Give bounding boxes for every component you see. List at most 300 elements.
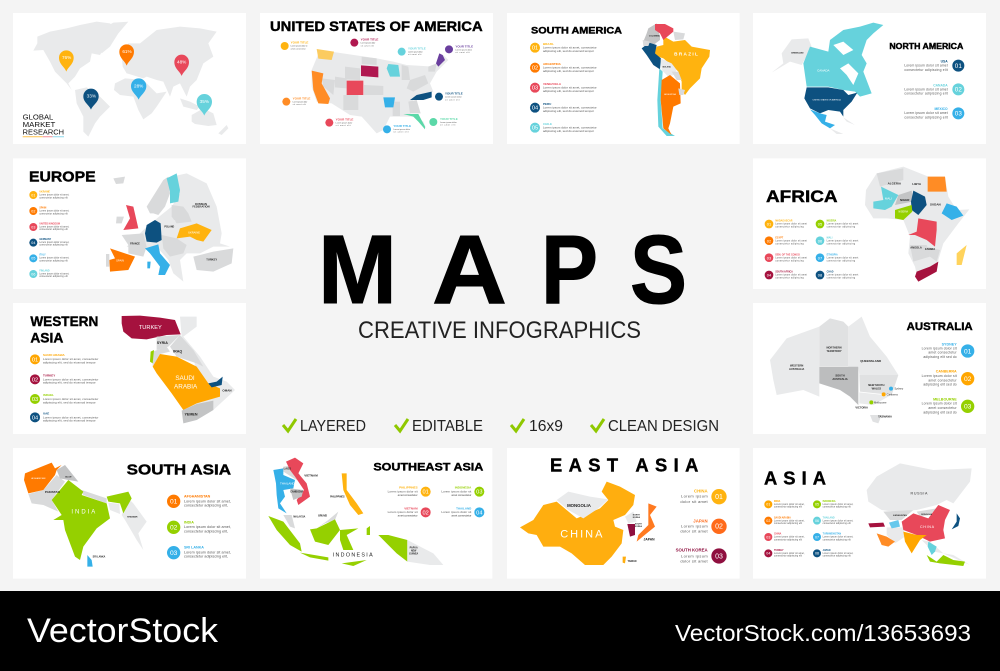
callout: florida: sit amet elit xyxy=(440,124,456,127)
item 06 thailand xyxy=(813,516,854,525)
item 02 saudi arabia: SAUDI ARABIA xyxy=(774,516,791,519)
feature: 16x9: 16x9 xyxy=(529,418,563,435)
item 01 madagascar: Lorem ipsum dolor sit amet xyxy=(775,222,807,225)
pin: 33%: 33% xyxy=(87,93,96,98)
item 02 vietnam xyxy=(388,506,431,518)
western asia map: SYRIA xyxy=(157,341,168,345)
callout: colorado: Lorem ipsum dolor xyxy=(336,121,353,124)
item 05 xyxy=(530,122,597,133)
item 01 sydney: amet consectetur xyxy=(928,351,958,355)
item 06 mali: consectetur adipiscing xyxy=(827,242,856,245)
item 03 dr congo xyxy=(765,253,807,262)
item 03 dr congo: Lorem ipsum dolor sit amet xyxy=(775,256,807,259)
western asia map: ARABIA xyxy=(174,383,198,390)
item 01: adipiscing elit, sed do eiusmod tempor xyxy=(543,49,594,53)
item 03 south korea: SOUTH KOREA xyxy=(676,548,709,553)
item 04 thailand: amet consectetur xyxy=(451,514,471,518)
item 02 spain xyxy=(29,207,70,215)
callout: california: Lorem ipsum dolor xyxy=(293,100,308,103)
item 01 afghanistan: consectetur adipiscing elit, xyxy=(184,504,228,508)
southeast asia map: CAMBODIA xyxy=(290,491,303,494)
asia map: MONGOLIA xyxy=(921,513,933,516)
item 04: PERU xyxy=(543,102,551,106)
australia map: NEW SOUTH xyxy=(868,383,885,387)
item 04 south africa xyxy=(765,270,807,279)
item 04 south africa: consectetur adipiscing xyxy=(775,276,804,279)
africa map: SUDAN xyxy=(930,203,941,207)
item 02 saudi arabia: consectetur adipiscing elit xyxy=(774,522,802,525)
panel: europe xyxy=(13,158,246,289)
item 03 xyxy=(530,82,597,93)
africa map: NIGERIA xyxy=(899,211,909,214)
pin: canberra: Canberra xyxy=(887,392,898,396)
item 05 indonesia: Lorem ipsum dolor sit amet, xyxy=(823,503,854,506)
item 05 nigeria: consectetur adipiscing xyxy=(827,225,856,228)
callout: maine: YOUR TITLE xyxy=(455,44,473,48)
southeast asia map: MALAYSIA xyxy=(293,515,306,518)
east asia map: KOREA xyxy=(633,516,640,519)
watermark footer band: VectorStock.com/13653693 xyxy=(675,620,971,646)
item 06 mali: 06 xyxy=(818,238,823,243)
heading: global market research: RESEARCH xyxy=(23,129,64,136)
item 07 turkmenistan: TURKMENISTAN xyxy=(823,533,841,536)
item 07 turkmenistan: Lorem ipsum dolor sit amet, xyxy=(823,536,854,539)
item 02 egypt: Lorem ipsum dolor sit amet xyxy=(775,239,807,242)
title: EAST ASIA xyxy=(550,455,698,476)
item 06 finland: Lorem ipsum dolor sit amet, xyxy=(39,272,70,275)
item 02 canada: CANADA xyxy=(933,83,948,87)
item 06 mali: Lorem ipsum dolor sit amet xyxy=(827,239,859,242)
item 02 spain: consectetur adipiscing elit xyxy=(39,212,68,215)
southeast asia map: THAILAND xyxy=(280,481,296,485)
item 08 chad: CHAD xyxy=(827,270,834,273)
panel: south america xyxy=(507,13,740,144)
east asia map: NORTH xyxy=(633,515,640,517)
pin: melbourne: Melbourne xyxy=(874,400,887,404)
item 01 philippines: amet consectetur xyxy=(398,493,418,497)
south america map: BRAZIL xyxy=(674,52,699,57)
south asia map: GILGIT xyxy=(65,476,72,478)
item 02 canberra: adipiscing elit sed do xyxy=(923,383,957,387)
item 02 canberra: CANBERRA xyxy=(936,370,957,374)
item 06 finland: FINLAND xyxy=(39,269,50,272)
southeast asia map: BRUNEI xyxy=(318,515,327,517)
item 02 egypt: 02 xyxy=(767,238,772,243)
item 01 philippines: Lorem ipsum dolor sit xyxy=(388,489,418,493)
pin: 35%: 35% xyxy=(200,99,209,104)
item 04 uae: Lorem ipsum dolor sit amet, consectetur xyxy=(43,415,98,419)
item 03: Lorem ipsum dolor sit amet, consectetur xyxy=(543,86,597,90)
heading: global market research: MARKET xyxy=(23,122,56,129)
east asia map: KOREA xyxy=(635,525,642,528)
item 04 turkey: consectetur adipiscing elit xyxy=(774,555,802,558)
item 02 vietnam: amet consectetur xyxy=(398,514,418,518)
watermark footer band: VectorStock xyxy=(27,612,219,650)
item 01 sydney: SYDNEY xyxy=(942,342,957,346)
item 03 mexico xyxy=(904,107,964,119)
africa map: LIBYA xyxy=(912,182,922,186)
callout: maine: Lorem ipsum dolor xyxy=(455,48,472,51)
heading: MAPS xyxy=(318,215,687,324)
item 06 thailand: consectetur adipiscing elit xyxy=(823,522,851,525)
item 04 germany: GERMANY xyxy=(39,238,52,241)
southeast asia map xyxy=(268,458,443,566)
item 02 xyxy=(530,62,597,73)
panel: north america xyxy=(753,13,986,144)
item 01 philippines: PHILIPPINES xyxy=(399,486,418,490)
east asia map xyxy=(520,482,657,565)
europe map: FEDERATION xyxy=(192,205,210,209)
item 01 sydney xyxy=(922,342,974,359)
item 05 indonesia: consectetur adipiscing elit xyxy=(823,506,851,509)
north america map: GREENLAND xyxy=(791,51,804,54)
item 03 sri lanka: consectetur adipiscing elit, xyxy=(184,555,228,559)
title: ASIA xyxy=(764,468,826,489)
africa map: ANGOLA xyxy=(910,246,922,250)
item 02 spain: 02 xyxy=(31,209,35,213)
item 04 germany xyxy=(29,238,70,247)
item 06 thailand: 06 xyxy=(815,519,819,523)
item 03 china: CHINA xyxy=(774,533,782,536)
title xyxy=(30,313,98,345)
item 05: Lorem ipsum dolor sit amet, consectetur xyxy=(543,126,597,130)
callout: north carolina xyxy=(435,92,463,101)
item 03 melbourne: adipiscing elit sed do xyxy=(923,410,957,414)
item 02 turkey: 02 xyxy=(32,377,38,383)
item 01 ukraine: UKRAINE xyxy=(39,191,50,194)
item 03 melbourne: amet consectetur xyxy=(928,406,958,410)
item 04: Lorem ipsum dolor sit amet, consectetur xyxy=(543,106,597,110)
item 02 vietnam: VIETNAM xyxy=(404,506,418,510)
callout: colorado: YOUR TITLE xyxy=(336,117,353,121)
item 03 dr congo: 03 xyxy=(767,255,772,260)
item 01 saudi arabia: 01 xyxy=(32,357,38,363)
item 03 sri lanka: SRI LANKA xyxy=(184,546,204,550)
australia map: WALES xyxy=(872,386,881,390)
africa map xyxy=(865,167,969,282)
item 01 philippines: 01 xyxy=(423,490,429,496)
item 03 melbourne: 03 xyxy=(964,404,972,411)
item 02 canada: Lorem ipsum dolor sit amet xyxy=(904,87,948,91)
panel: australia xyxy=(753,303,986,434)
panel: western asia xyxy=(13,303,246,434)
item 07 ethiopia: Lorem ipsum dolor sit amet xyxy=(827,256,859,259)
callout: arkansas xyxy=(383,124,411,134)
item 03 mexico: MEXICO xyxy=(935,107,948,111)
item 02 egypt: consectetur adipiscing xyxy=(775,242,804,245)
item 02 turkey: Lorem ipsum dolor sit amet, consectetur xyxy=(43,377,98,381)
item 01 afghanistan: 01 xyxy=(170,499,178,506)
item 03 israel: Lorem ipsum dolor sit amet, consectetur xyxy=(43,397,98,401)
item 06 finland: 06 xyxy=(31,272,35,276)
item 06 mali: MALI xyxy=(827,236,833,239)
item 02 canberra: amet consectetur xyxy=(928,378,958,382)
callout: north carolina: sit amet elit xyxy=(445,98,460,101)
pin: 28% xyxy=(131,78,146,100)
item 01 afghanistan: AFGHANISTAN xyxy=(184,495,211,499)
item 02: ARGENTINA xyxy=(543,62,562,66)
item 04 germany: 04 xyxy=(31,241,35,245)
item 03 united kingdom: Lorem ipsum dolor sit amet, xyxy=(39,225,70,228)
item 07 ethiopia xyxy=(816,253,859,262)
panel: africa xyxy=(753,158,986,289)
item 01 afghanistan xyxy=(167,495,231,508)
feature: clean design: CLEAN DESIGN xyxy=(608,418,719,435)
callout: arkansas: YOUR TITLE xyxy=(393,124,411,128)
item 02 japan: Lorem ipsum xyxy=(681,524,708,529)
item 05 italy: 05 xyxy=(31,257,35,261)
item 02 india: consectetur adipiscing elit, xyxy=(184,529,228,533)
item 02 turkey: adipiscing elit, sed do eiusmod tempor xyxy=(43,381,96,385)
item 08 japan: consectetur adipiscing elit xyxy=(823,555,851,558)
southeast asia map: NEW xyxy=(411,550,417,552)
item 06 finland: consectetur adipiscing elit xyxy=(39,275,68,278)
item 05: CHILE xyxy=(543,122,552,126)
australia map: AUSTRALIA xyxy=(832,377,848,381)
item 06 thailand: THAILAND xyxy=(823,516,835,519)
north america map: UNITED STATES OF AMERICA xyxy=(813,99,841,102)
item 05 nigeria: 05 xyxy=(818,222,823,227)
item 03 israel: 03 xyxy=(32,397,38,403)
western asia map xyxy=(122,316,235,423)
US map xyxy=(312,49,448,133)
heading: MAPS: P xyxy=(541,215,598,324)
item 01 india xyxy=(764,500,805,509)
item 01 madagascar: 01 xyxy=(767,222,772,227)
item 07 turkmenistan xyxy=(813,533,854,541)
feature: layered: LAYERED xyxy=(300,418,366,435)
callout: arkansas: Lorem ipsum dolor xyxy=(393,128,410,131)
item 03 indonesia: INDONESIA xyxy=(455,486,472,490)
item 03 melbourne xyxy=(922,397,974,414)
callout: south dakota: Lorem ipsum dolor xyxy=(361,42,376,45)
south asia map xyxy=(24,463,147,567)
southeast asia map: LAOS xyxy=(284,466,291,470)
south asia map: AFGHANISTAN xyxy=(31,477,46,480)
south america map: ARGENTINA xyxy=(664,93,676,96)
south america map: COLOMBIA xyxy=(649,35,660,38)
callout: north carolina: Lorem ipsum dolor xyxy=(445,96,462,99)
heading: global market research: GLOBAL xyxy=(23,115,53,122)
asia map: CHINA xyxy=(920,525,935,529)
east asia map: MONGOLIA xyxy=(567,503,592,508)
southeast asia map: PAPUA xyxy=(410,546,418,549)
callout: wisconsin xyxy=(398,46,426,56)
title: SOUTHEAST ASIA xyxy=(373,462,483,474)
item 03: 03 xyxy=(532,86,538,92)
heading: MAPS: S xyxy=(630,215,687,324)
item 05: 05 xyxy=(532,126,538,132)
item 04 turkey xyxy=(764,549,805,558)
australia map xyxy=(770,317,898,423)
item 06 thailand: Lorem ipsum dolor sit amet, xyxy=(823,519,854,522)
africa map: MALI xyxy=(885,196,892,200)
item 03 united kingdom xyxy=(29,223,70,231)
item 02 vietnam: Lorem ipsum dolor sit xyxy=(388,510,418,514)
item 05 italy: Lorem ipsum dolor sit amet, xyxy=(39,257,70,260)
panel: east asia xyxy=(507,448,740,579)
callout: california xyxy=(282,96,310,106)
callout: wisconsin: Lorem ipsum dolor xyxy=(408,50,423,53)
item 02 egypt: EGYPT xyxy=(775,237,784,239)
title: AFRICA xyxy=(766,188,838,206)
item 02 canberra: 02 xyxy=(964,376,972,383)
item 03 united kingdom: 03 xyxy=(31,225,35,229)
callout: wisconsin: sit amet elit xyxy=(408,53,422,56)
item 02 egypt xyxy=(765,236,807,245)
item 04 thailand: THAILAND xyxy=(456,506,472,510)
southeast asia map: PHILIPPINES xyxy=(330,496,345,498)
south asia map: INDIA xyxy=(71,510,97,516)
pin: melbourne xyxy=(869,400,887,404)
item 02 india: 02 xyxy=(170,525,178,532)
item 02: 02 xyxy=(532,66,538,72)
pin: canberra xyxy=(882,392,898,396)
world land masses xyxy=(33,22,228,137)
item 05 italy: ITALY xyxy=(39,254,46,257)
item 01 usa xyxy=(904,60,964,72)
callout: north carolina: YOUR TITLE xyxy=(445,92,463,96)
item 05 indonesia xyxy=(813,500,854,509)
pin: sydney xyxy=(889,387,904,391)
item 08 chad: consectetur adipiscing xyxy=(827,276,856,279)
item 04 uae: UAE xyxy=(43,411,49,415)
item 02 india xyxy=(167,520,231,534)
item 06 finland xyxy=(29,269,70,278)
item 02 japan: 02 xyxy=(715,524,723,531)
item 07 turkmenistan: consectetur adipiscing elit xyxy=(823,538,851,541)
western asia map: SAUDI xyxy=(175,375,195,382)
panel: world map xyxy=(13,13,246,144)
east asia map: TAIWAN xyxy=(627,560,637,563)
watermark footer band xyxy=(0,591,1000,671)
item 03 israel xyxy=(30,393,98,404)
item 01 saudi arabia: SAUDI ARABIA xyxy=(43,353,65,357)
item 02 japan: JAPAN xyxy=(693,518,708,523)
item 08 japan: Lorem ipsum dolor sit amet, xyxy=(823,552,854,555)
title: NORTH AMERICA xyxy=(889,42,964,51)
asia map: RUSSIA xyxy=(911,492,928,496)
item 02 canberra: Lorem ipsum dolor sit xyxy=(922,374,957,378)
item 08 chad: Lorem ipsum dolor sit amet xyxy=(827,273,859,276)
item 03 mexico: consectetur adipiscing elit xyxy=(904,115,948,119)
title: UNITED STATES OF AMERICA xyxy=(270,19,483,34)
australia map: TERRITORY xyxy=(826,349,842,353)
item 01 ukraine: Lorem ipsum dolor sit amet, xyxy=(39,194,70,197)
item 02 saudi arabia: 02 xyxy=(766,519,770,523)
item 03: adipiscing elit, sed do eiusmod tempor xyxy=(543,89,594,93)
feature: 16x9 xyxy=(511,418,563,435)
western asia map: TURKEY xyxy=(139,325,162,331)
item 03 indonesia: amet consectetur xyxy=(451,493,471,497)
title: EUROPE xyxy=(29,169,96,185)
pin: 61% xyxy=(119,44,134,66)
callout: maine xyxy=(445,44,473,54)
item 02 spain: Lorem ipsum dolor sit amet, xyxy=(39,210,70,213)
item 03 israel: adipiscing elit, sed do eiusmod tempor xyxy=(43,400,96,404)
item 01 sydney: 01 xyxy=(964,348,972,355)
item 01 china: dolor sit amet xyxy=(680,499,709,504)
item 01 usa: Lorem ipsum dolor sit amet xyxy=(904,64,948,68)
item 03 sri lanka: Lorem ipsum dolor sit amet, xyxy=(184,550,231,554)
pin: 35% xyxy=(197,94,212,116)
callout: maine: sit amet elit xyxy=(455,51,470,54)
item 02 turkey xyxy=(30,373,98,385)
europe map: RUSSIAN xyxy=(195,202,207,206)
item 07 ethiopia: ETHIOPIA xyxy=(827,253,838,256)
item 01 india: INDIA xyxy=(774,500,781,503)
item 05 italy xyxy=(29,254,70,262)
item 04 uae xyxy=(30,411,98,423)
title: SOUTH AMERICA xyxy=(531,25,622,35)
south asia map: PAKISTAN xyxy=(45,490,60,494)
europe map: TURKEY xyxy=(206,258,217,262)
item 02: adipiscing elit, sed do eiusmod tempor xyxy=(543,69,594,73)
australia map: QUEENSLAND xyxy=(860,359,882,363)
item 05 nigeria xyxy=(816,219,859,228)
item 04 south africa: Lorem ipsum dolor sit amet xyxy=(775,273,807,276)
item 02 vietnam: 02 xyxy=(423,510,429,516)
item 03 south korea: dolor sit amet xyxy=(680,559,709,564)
south america map: BOLIVIA xyxy=(663,66,671,69)
item 02 japan xyxy=(680,518,727,534)
item 05 italy: consectetur adipiscing elit xyxy=(39,259,68,262)
item 03 sri lanka: 03 xyxy=(170,550,178,557)
item 01 usa: consectetur adipiscing elit xyxy=(904,68,948,72)
pin: sydney: Sydney xyxy=(894,387,904,391)
item 08 japan: 08 xyxy=(815,552,819,556)
item 01 sydney: adipiscing elit sed do xyxy=(923,355,957,359)
item 03 indonesia: Lorem ipsum dolor sit xyxy=(441,489,471,493)
item 04: adipiscing elit, sed do eiusmod tempor xyxy=(543,109,594,113)
southeast asia map: GUINEA xyxy=(409,552,419,555)
title: SOUTH ASIA xyxy=(127,463,231,479)
item 04 germany: consectetur adipiscing elit xyxy=(39,244,68,247)
pin: 76% xyxy=(59,50,74,72)
pin: 33% xyxy=(83,89,99,110)
item 03 sri lanka xyxy=(167,546,231,559)
europe map: POLAND xyxy=(164,226,175,229)
item 01: 01 xyxy=(532,46,538,52)
australia map: TASMANIA xyxy=(878,414,892,418)
item 07 ethiopia: 07 xyxy=(818,255,823,260)
asia map xyxy=(867,463,972,566)
item 07 ethiopia: consectetur adipiscing xyxy=(827,259,856,262)
australia map: SOUTH xyxy=(835,374,845,378)
item 02 spain: SPAIN xyxy=(39,207,47,210)
item 01 india: Lorem ipsum dolor sit amet, xyxy=(774,503,805,506)
item 02 saudi arabia: Lorem ipsum dolor sit amet, xyxy=(774,519,805,522)
item 02 canada xyxy=(904,83,964,96)
item 02: Lorem ipsum dolor sit amet, consectetur xyxy=(543,66,597,70)
pin: 48%: 48% xyxy=(177,59,186,64)
australia map: VICTORIA xyxy=(855,405,868,409)
panel: united states of america xyxy=(260,13,493,144)
item 03 china xyxy=(764,533,805,541)
australia map: AUSTRALIA xyxy=(789,367,804,371)
item 01 saudi arabia xyxy=(30,353,98,364)
item 02 saudi arabia xyxy=(764,516,805,525)
panel: south asia xyxy=(13,448,246,579)
item 01: BRAZIL xyxy=(543,42,554,46)
item 01 xyxy=(530,42,597,53)
africa map: NIGER xyxy=(900,198,910,202)
item 03 china: Lorem ipsum dolor sit amet, xyxy=(774,536,805,539)
title: ASIA xyxy=(30,329,63,345)
item 04 thailand: Lorem ipsum dolor sit xyxy=(441,510,471,514)
item 01 india: consectetur adipiscing elit xyxy=(774,506,802,509)
east asia map: JAPAN xyxy=(643,537,655,541)
